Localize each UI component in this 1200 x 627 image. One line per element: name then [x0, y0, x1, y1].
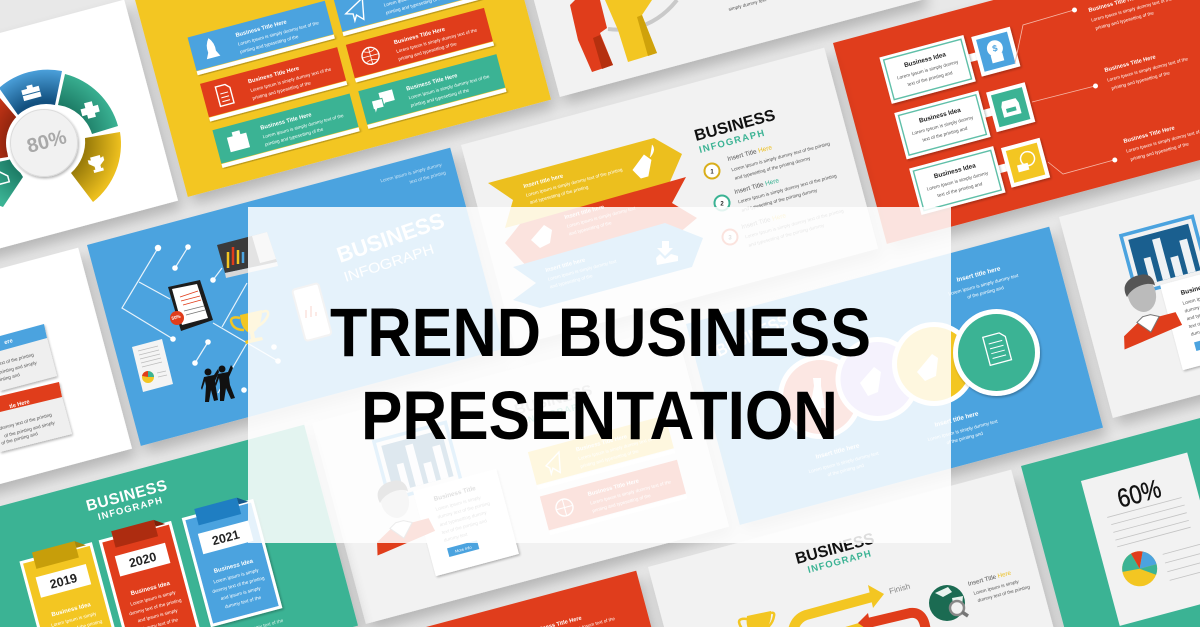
ring: [608, 0, 677, 30]
slide background: [0, 0, 178, 298]
avatar: [360, 474, 437, 556]
circle: green: [953, 309, 1040, 396]
text: item 1: [1088, 0, 1175, 31]
banner text: yellow: Insert title here: [523, 174, 564, 190]
idea row 3: text of the printing and: [937, 181, 983, 198]
list item 2: [714, 162, 840, 213]
row: yellow: Business Title Here: [575, 434, 628, 453]
slide background: [273, 571, 690, 627]
row: green briefcase: Business Title Here: [260, 112, 312, 132]
text block: [967, 566, 1031, 604]
row: yellow: printing and typesetting of the: [580, 448, 640, 469]
slide background: [0, 425, 358, 627]
card: red: of the printing and simply: [4, 420, 56, 438]
row: red globe: [346, 8, 494, 83]
row: blue rocket: printing and typesetting of the: [239, 34, 299, 54]
heading: INFOGRAPH: [97, 495, 164, 523]
text: red item: Lorem Ipsum is simply dummy text: [808, 450, 880, 474]
panel: white list slide left: [0, 248, 132, 546]
card: 2019: [19, 537, 121, 627]
frosted overlay: [248, 207, 951, 543]
icon: printer: [79, 100, 101, 120]
text: item 3: [1123, 117, 1200, 162]
panel: blue network slide: [87, 148, 504, 446]
icon: phone: [292, 283, 332, 341]
paper lines: [1107, 497, 1191, 547]
list item 2: Lorem Ipsum is simply dummy text of the printing: [738, 173, 838, 204]
donut segment: yellow: [71, 132, 121, 202]
card: 2020: 2020: [127, 550, 158, 570]
text card: Business Title: [433, 485, 477, 503]
donut segment: blue: [0, 70, 62, 115]
list item 3: Insert Title Here: [741, 212, 787, 231]
row: green chat: printing and typesetting of the: [410, 87, 470, 108]
text: red item: of the printing and: [827, 463, 865, 477]
row: red: printing and typesetting of the: [592, 493, 652, 513]
row: blue rocket: Business Title Here: [235, 19, 287, 39]
row: red: Lorem Ipsum is simply dummy text of the: [590, 479, 672, 506]
slide background: [833, 0, 1200, 244]
text: item 3: printing and typesetting of the: [1130, 141, 1190, 162]
slide background: [1059, 120, 1200, 418]
percent label: 80%: [25, 126, 69, 158]
text: red item: [805, 438, 882, 482]
list item 1: Lorem Ipsum is simply dummy text of the printing: [731, 141, 831, 172]
panel: grey banner slide: [461, 48, 878, 346]
card: blue: ere: [4, 338, 14, 346]
network nodes: [155, 244, 281, 393]
row: red document: Business Title Here: [247, 66, 300, 85]
row: yellow: Lorem Ipsum is simply dummy text of the: [578, 435, 660, 461]
faded heading: BUSINESS: [513, 382, 594, 419]
row: red: [540, 460, 687, 535]
slide background: [134, 0, 551, 197]
heading: INFOGRAPH: [807, 548, 872, 576]
panel: yellow slide with six rows: [134, 0, 551, 197]
text card: dummy text: [443, 532, 469, 543]
banner text: red: [564, 197, 639, 236]
center ring: [6, 105, 82, 181]
banner: red: [505, 177, 697, 270]
text block: dummy text of the printing: [977, 584, 1031, 603]
idea row 3: [909, 134, 1051, 215]
circle: red: [778, 355, 862, 439]
chart icon: [374, 422, 461, 500]
icon: laptop: [217, 232, 278, 278]
faded heading: BUSINESS: [713, 310, 791, 361]
text card: [413, 469, 519, 576]
row: blue rocket: [188, 1, 335, 75]
idea row 2: text of the printing and: [922, 126, 968, 143]
list item 2: 2: [720, 202, 724, 208]
list item 2: and typesetting of the printing dummy: [741, 188, 818, 213]
icon: house: [0, 169, 9, 186]
text card: text of the printing and: [441, 518, 488, 535]
banner text: red: and typesetting of the: [568, 220, 613, 236]
connector lines: [1015, 10, 1114, 174]
text block: Lorem Ipsum is simply: [973, 579, 1020, 596]
row: red document: Lorem Ipsum is simply dummy text of the: [250, 66, 332, 93]
text: item 2: printing and typesetting of the: [1111, 70, 1171, 91]
panel: blue circles slide: [686, 227, 1103, 525]
icon: download: [656, 241, 678, 265]
row: red globe: Lorem Ipsum is simply dummy text of the: [396, 27, 478, 54]
pie chart: [1118, 547, 1161, 590]
card: 2021: 2021: [211, 527, 241, 548]
icon: trophy: [87, 154, 107, 174]
text: yellow item: [924, 406, 1001, 450]
list item 1: Insert Title Here: [727, 144, 773, 163]
card: 2020: dummy text of the printing: [129, 597, 182, 616]
icon: document: [132, 339, 173, 392]
figure: red: [570, 0, 613, 72]
card: 2020: and Ipsum is simply: [137, 608, 179, 623]
text: yellow item: of the printing and: [946, 431, 984, 445]
donut segment: bottom green: [0, 159, 23, 207]
slide background: [312, 326, 729, 624]
panel: grey avatar slide right: [1059, 120, 1200, 418]
text: item 1: printing and typesetting of the: [1095, 10, 1155, 31]
banner text: blue: Insert title here: [545, 258, 586, 274]
side lines: [1163, 542, 1200, 580]
panel: red slide business idea: [833, 0, 1200, 244]
banner: blue: [513, 223, 703, 308]
text card: More Info: [454, 544, 473, 554]
icon: tag: [633, 145, 654, 178]
arrow: red: [858, 613, 926, 627]
text: top item: Insert title here: [956, 265, 1002, 284]
slide caption: text of the printing: [409, 170, 447, 185]
text card: and typesetting dummy: [439, 510, 488, 527]
text: item 2: [1104, 46, 1191, 91]
slide background: [461, 48, 878, 346]
card: red: of the printing and: [1, 431, 39, 446]
row: red: Business Title Here: [587, 478, 640, 498]
card: 2021: Business Idea: [213, 559, 254, 575]
donut segment: green: [58, 74, 118, 134]
card: 2021: dummy text of the printing: [212, 575, 265, 594]
card: blue: [0, 324, 57, 391]
card: 2020: Business Idea: [130, 581, 171, 597]
banner text: red: Insert title here: [564, 205, 605, 221]
row: red document: printing and typesetting of the: [252, 80, 312, 101]
icon: tag light: [531, 225, 552, 248]
idea row 2: Lorem Ipsum is simply dummy: [911, 115, 974, 136]
banner text: yellow: and typesetting of the printing: [529, 184, 589, 205]
center circle: [10, 110, 78, 176]
banner text: blue: and typesetting of the: [549, 273, 594, 289]
card: red: dummy text of the printing: [0, 412, 53, 431]
card: 2021: Lorem Ipsum is simply: [213, 567, 260, 584]
title: [330, 294, 871, 454]
avatar: [1107, 268, 1184, 350]
title line 2: PRESENTATION: [361, 377, 838, 454]
text: red item: Insert title here: [815, 442, 861, 461]
card: 2021: [182, 494, 281, 625]
text: top item: Lorem Ipsum is simply dummy text: [948, 273, 1020, 296]
row: yellow: [528, 415, 675, 490]
card: 2021: and Ipsum is simply: [220, 585, 262, 601]
text card: [1160, 263, 1200, 370]
idea row 3: Lorem Ipsum is simply dummy: [926, 170, 989, 192]
card: red: [0, 382, 72, 452]
panel: right green slide: [1021, 369, 1200, 627]
row: green briefcase: printing and typesetting of the: [264, 127, 324, 147]
row: red document: [200, 47, 347, 122]
icon: globe: [929, 585, 968, 621]
card: 2019: 2019: [48, 571, 79, 592]
text: yellow item: Lorem Ipsum is simply dummy text: [927, 418, 999, 442]
text: yellow item: Insert title here: [934, 410, 980, 429]
heading: business infograph: BUSINESS: [693, 107, 778, 145]
card: 2021: dummy text of the: [224, 595, 262, 609]
slide background: [648, 470, 1065, 627]
label: finish: Finish: [888, 582, 911, 596]
text card: dummy text of the printing: [437, 501, 491, 520]
list item 2: Insert Title Here: [734, 177, 780, 196]
slide title: BUSINESS: [333, 208, 448, 268]
donut segment: red: [0, 90, 17, 160]
slide caption: Lorem Ipsum is simply dummy: [380, 162, 443, 183]
idea row 3: Business Idea: [933, 162, 977, 180]
faded heading: INFOGRAPH: [523, 400, 586, 426]
card: 2019: Business Idea: [51, 602, 92, 618]
arrow: yellow: [792, 585, 884, 627]
icon: briefcase: [20, 83, 42, 101]
panel: bottom red slide: [273, 571, 690, 627]
chart icon: [1121, 216, 1200, 294]
text: top item: [945, 261, 1022, 304]
text: item 3: Business Title Here: [1123, 125, 1175, 145]
slide background: [1021, 369, 1200, 627]
panel: white 80% donut slide: [0, 0, 178, 298]
icon: people: [201, 365, 235, 402]
list item 1: [704, 129, 833, 181]
text: item 2: Business Title Here: [1104, 54, 1156, 74]
list item 3: 3: [728, 236, 732, 242]
banner text: blue: Lorem Ipsum is simply dummy text: [547, 258, 618, 282]
card: 2020: [99, 516, 200, 627]
heading: BUSINESS: [794, 530, 877, 568]
figure: yellow: [605, 0, 657, 62]
title line 1: TREND BUSINESS: [330, 294, 871, 371]
slide title: INFOGRAPH: [342, 241, 436, 285]
text: item 2: Lorem Ipsum is simply dummy text of the: [1107, 56, 1189, 83]
row: red globe: Business Title Here: [393, 27, 446, 46]
badge: 50%: [171, 314, 181, 321]
list item 3: and typesetting of the printing dummy: [748, 223, 825, 248]
banner text: red: Lorem Ipsum is simply dummy text: [566, 205, 637, 229]
idea row 1: Lorem Ipsum is simply dummy: [896, 59, 960, 81]
panel: top grey slide with figures: [506, 0, 923, 97]
idea row 2: Business Idea: [918, 107, 962, 125]
slide background: [506, 0, 923, 97]
banner: yellow: [488, 138, 682, 228]
list item 3: Lorem Ipsum is simply dummy text of the printing: [745, 208, 845, 239]
network lines: [122, 247, 278, 393]
slide background: [87, 148, 504, 446]
slide background: [686, 227, 1103, 525]
circle: yellow: [892, 322, 976, 406]
slide background: [0, 248, 132, 546]
idea row 1: text of the printing and: [907, 70, 953, 87]
row: green chat: Business Title Here: [406, 73, 458, 93]
banner text: yellow: Lorem Ipsum is simply dummy text of the printing: [525, 167, 623, 198]
panel: green timeline slide: [0, 425, 358, 627]
banner text: yellow: [523, 158, 626, 205]
icon: trophy: [739, 611, 774, 627]
list item 1: and typesetting of the printing dummy: [734, 156, 812, 181]
text card: Lorem Ipsum is simply: [435, 495, 482, 512]
idea row 1: [879, 23, 1021, 104]
row: red globe: printing and typesetting of the: [398, 41, 458, 62]
text: top item: of the printing and: [967, 285, 1005, 300]
row: blue rocket: Lorem Ipsum is simply dummy text of the: [237, 20, 320, 47]
panel: bottom grey arrow slide: [648, 470, 1065, 627]
idea row 1: $: [991, 43, 999, 54]
row: green chat: Lorem Ipsum is simply dummy text of the: [408, 74, 490, 100]
heading: business infograph: INFOGRAPH: [698, 128, 766, 156]
paper: [1081, 453, 1200, 626]
banner text: blue: [545, 250, 620, 289]
idea row 1: Business Idea: [903, 51, 947, 69]
card: red: tle Here: [9, 399, 31, 410]
list item 3: [722, 197, 847, 248]
row: green briefcase: Lorem Ipsum is simply dummy text of the: [262, 113, 345, 139]
row: green chat: [358, 54, 507, 129]
percent label: 60%: [1114, 473, 1164, 514]
idea row 2: [894, 78, 1036, 159]
local slide contents: [879, 23, 1051, 215]
badge: [170, 311, 184, 325]
icon: tablet: [168, 280, 213, 331]
card: 2020: Lorem Ipsum is simply: [130, 590, 177, 607]
panel: center avatar slide: [312, 326, 729, 624]
row: blue plane: [333, 0, 482, 36]
text block: Insert Title Here: [967, 570, 1012, 588]
list item 1: 1: [710, 170, 714, 176]
connector dots: [1072, 8, 1117, 162]
row: green briefcase: [212, 94, 360, 168]
circle: purple: [836, 337, 920, 421]
heading: BUSINESS: [84, 477, 169, 515]
icon: trophy: [231, 310, 268, 344]
